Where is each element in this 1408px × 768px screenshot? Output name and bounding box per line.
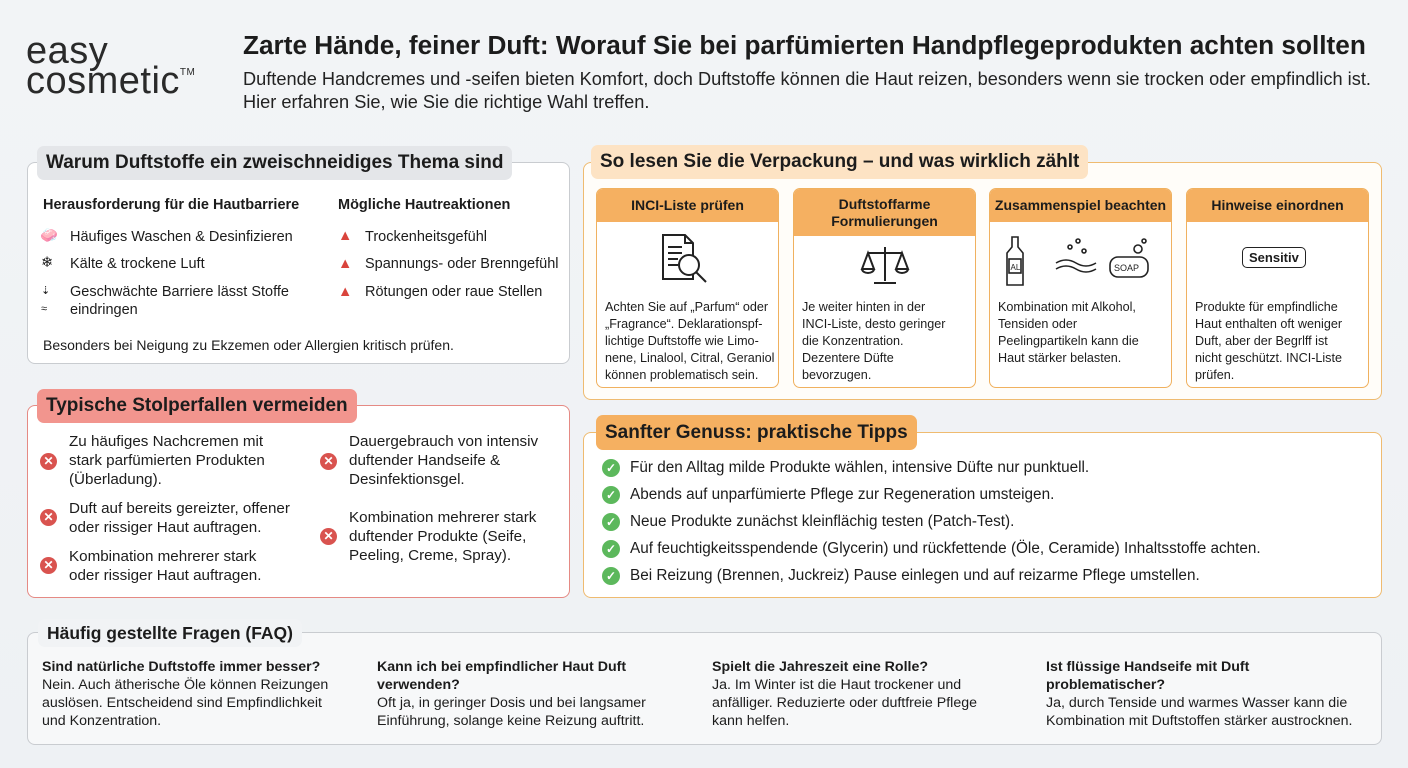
card: Zusammenspiel: Tensiden oder [998, 317, 1077, 331]
card: Duftstoffarme: Formulierungen [831, 212, 938, 228]
card: Duftstoffarme: die Konzentration. [802, 334, 904, 348]
list: pitfalls right: Kombination mehrerer stark [349, 509, 536, 526]
card: Zusammenspiel: Haut stärker belasten. [998, 351, 1121, 365]
heading: Verpackung: So lesen Sie die Verpackung – und was wirklich zählt [600, 151, 1079, 172]
card: INCI: INCI-Liste prüfen [631, 197, 744, 213]
card: Hinweise [1186, 188, 1369, 388]
card: Hinweise: Haut enthalten oft weniger [1195, 317, 1342, 331]
faq 1 [42, 659, 328, 729]
list: barriere: 🧼 [40, 228, 58, 244]
card: Duftstoffarme: INCI-Liste, desto geringer [802, 317, 946, 331]
list: pitfalls right: Desinfektionsgel. [349, 471, 465, 488]
list: pitfalls right: duftender Produkte (Seife, [349, 528, 526, 545]
card: Duftstoffarme [793, 188, 976, 388]
card: Hinweise: Hinweise einordnen [1211, 197, 1344, 213]
list: barriere: ❄ [41, 255, 53, 271]
title: Zarte Hände, feiner Duft: Worauf Sie bei parfümierten Handpflegeprodukten achten sollten [243, 30, 1366, 60]
faq 1: Nein. Auch ätherische Öle können Reizungen [42, 677, 328, 693]
list: pitfalls left [40, 433, 290, 584]
card: INCI: nene, Linalool, Citral, Geraniol [605, 351, 774, 365]
card: Duftstoffarme: bevorzugen. [802, 368, 871, 382]
faq 4: Ist flüssige Handseife mit Duft [1046, 659, 1249, 675]
list: tips: ✓ [606, 515, 616, 529]
list: pitfalls right: ✕ [323, 454, 334, 468]
list: barriere: ≈ [41, 303, 47, 315]
card: INCI: lichtige Duftstoffe wie Limo- [605, 334, 759, 348]
panel: Tipps [583, 432, 1382, 598]
heading: Stolperfallen: Typische Stolperfallen vermeiden [46, 395, 348, 416]
list: reaktionen: Rötungen oder raue Stellen [365, 284, 542, 300]
list: reaktionen: ▲ [338, 256, 352, 272]
heading: FAQ: Häufig gestellte Fragen (FAQ) [47, 622, 293, 642]
list: reaktionen: ▲ [338, 228, 352, 244]
card: Zusammenspiel [989, 188, 1172, 388]
icon: Sensitiv label [1242, 247, 1306, 268]
card: Hinweise: Produkte für empfindliche [1195, 300, 1338, 314]
list: reaktionen: ▲ [338, 284, 352, 300]
icons: alcohol, skin, soap: AL [1010, 263, 1021, 272]
faq 4: Ja, durch Tenside und warmes Wasser kann die [1046, 695, 1347, 711]
list: pitfalls right: duftender Handseife & [349, 452, 500, 469]
logo: cosmeticTM [26, 60, 195, 102]
card: Zusammenspiel: Zusammenspiel beachten [995, 197, 1166, 213]
faq 2: Einführung, solange keine Reizung auftritt. [377, 713, 644, 729]
list: pitfalls left: Duft auf bereits gereizter, offener [69, 500, 290, 517]
list: tips: Auf feuchtigkeitsspendende (Glycerin) und rückfettende (Öle, Ceramide) Inhaltsstoffe achten. [630, 540, 1261, 557]
heading: Tipps: Sanfter Genuss: praktische Tipps [605, 422, 908, 442]
heading: Warum: Warum Duftstoffe ein zweischneidiges Thema sind [46, 152, 503, 173]
faq 2 [377, 659, 646, 729]
list: reaktionen: Trockenheitsgefühl [365, 229, 487, 245]
list: barriere: Häufiges Waschen & Desinfizieren [70, 229, 293, 245]
list: pitfalls left: stark parfümierten Produkten [69, 452, 265, 469]
list: tips: Bei Reizung (Brennen, Juckreiz) Pause einlegen und auf reizarme Pflege umstellen. [630, 567, 1200, 584]
panel: Stolperfallen [27, 405, 570, 598]
icon: scale [860, 247, 910, 284]
list: tips: ✓ [606, 569, 616, 583]
list: pitfalls right: Peeling, Creme, Spray). [349, 547, 511, 564]
list: tips: ✓ [606, 542, 616, 556]
list: pitfalls left: ✕ [43, 510, 54, 524]
card: INCI: „Fragrance“. Deklarationspf- [605, 317, 762, 331]
list: pitfalls right: ✕ [323, 529, 334, 543]
card: Hinweise: Duft, aber der Begrlff ist [1195, 334, 1328, 348]
faq 2: Oft ja, in geringer Dosis und bei langsamer [377, 695, 646, 711]
list: pitfalls left: ✕ [43, 454, 54, 468]
icon: Sensitiv label: Sensitiv [1249, 250, 1299, 265]
panel: Warum Duftstoffe [27, 162, 570, 364]
card: Hinweise: prüfen. [1195, 368, 1234, 382]
card: Hinweise: nicht geschützt. INCI-Liste [1195, 351, 1342, 365]
panel: FAQ [27, 632, 1382, 745]
list: pitfalls left: ✕ [43, 558, 54, 572]
list: pitfalls left: Zu häufiges Nachcremen mit [69, 433, 263, 450]
icon: document magnifier [662, 234, 707, 283]
subheading: Hautreaktionen: Mögliche Hautreaktionen [338, 197, 510, 213]
list: reaktionen [338, 228, 558, 300]
heading: Warum [37, 146, 512, 180]
list: tips: ✓ [606, 488, 616, 502]
faq 3: anfälliger. Reduzierte oder duftfreie Pflege [712, 695, 977, 711]
faq 1: auslösen. Entscheidend sind Empfindlichkeit [42, 695, 322, 711]
card: Duftstoffarme: Dezentere Düfte [802, 351, 894, 365]
list: tips: Für den Alltag milde Produkte wählen, intensive Düfte nur punktuell. [630, 459, 1089, 476]
logo: easy [26, 30, 108, 72]
faq 2: verwenden? [377, 677, 460, 693]
heading: FAQ [38, 619, 302, 647]
faq 4: problematischer? [1046, 677, 1165, 693]
faq 4: Kombination mit Duftstoffen stärker austrocknen. [1046, 713, 1352, 729]
icons: alcohol, skin, soap [1006, 236, 1149, 286]
heading: Tipps [596, 415, 917, 450]
faq 4 [1046, 659, 1352, 729]
list: reaktionen: Spannungs- oder Brenngefühl [365, 256, 558, 272]
faq 3: Ja. Im Winter ist die Haut trockener und [712, 677, 961, 693]
card: Zusammenspiel: Kombination mit Alkohol, [998, 300, 1136, 314]
faq 2: Kann ich bei empfindlicher Haut Duft [377, 659, 626, 675]
list: pitfalls left: oder rissiger Haut auftragen. [69, 567, 261, 584]
card: Duftstoffarme: Je weiter hinten in der [802, 300, 925, 314]
list: pitfalls right [320, 433, 538, 564]
list: pitfalls right: Dauergebrauch von intensiv [349, 433, 538, 450]
card: Duftstoffarme: Duftstoffarme [839, 196, 930, 212]
logo [26, 30, 195, 102]
subtitle [243, 69, 1371, 112]
list: barriere: eindringen [70, 302, 138, 318]
list: tips: Abends auf unparfümierte Pflege zur Regeneration umsteigen. [630, 486, 1054, 503]
heading: Stolperfallen [37, 389, 357, 423]
list: barriere [40, 228, 293, 318]
card: INCI: Achten Sie auf „Parfum“ oder [605, 300, 768, 314]
heading: Verpackung [591, 145, 1088, 179]
list: pitfalls left: Kombination mehrerer stark [69, 548, 256, 565]
panel: Verpackung [583, 162, 1382, 400]
subheading: Hautbarriere: Herausforderung für die Hautbarriere [43, 197, 299, 213]
list: tips [602, 459, 1261, 585]
list: barriere: Geschwächte Barriere lässt Stoffe [70, 284, 289, 300]
card: INCI [596, 188, 779, 388]
faq 1: und Konzentration. [42, 713, 161, 729]
note: Besonders bei Neigung zu Ekzemen oder Allergien kritisch prüfen. [43, 337, 454, 353]
subtitle: Hier erfahren Sie, wie Sie die richtige Wahl treffen. [243, 92, 649, 112]
icons: alcohol, skin, soap: SOAP [1114, 263, 1139, 273]
list: barriere: Kälte & trockene Luft [70, 256, 205, 272]
list: barriere: ⇣ [41, 285, 50, 297]
list: tips: ✓ [606, 461, 616, 475]
card: INCI: können problematisch sein. [605, 368, 758, 382]
subtitle: Duftende Handcremes und -seifen bieten Komfort, doch Duftstoffe können die Haut reizen, besonders wenn sie trocken oder empfindlich ist. [243, 69, 1371, 89]
card: Zusammenspiel: Peelingpartikeln kann die [998, 334, 1139, 348]
faq 3 [712, 659, 977, 729]
list: tips: Neue Produkte zunächst kleinflächig testen (Patch-Test). [630, 513, 1014, 530]
list: pitfalls left: (Überladung). [69, 471, 162, 488]
faq 3: Spielt die Jahreszeit eine Rolle? [712, 659, 928, 675]
faq 1: Sind natürliche Duftstoffe immer besser? [42, 659, 320, 675]
faq 3: kann helfen. [712, 713, 789, 729]
list: pitfalls left: oder rissiger Haut auftragen. [69, 519, 261, 536]
